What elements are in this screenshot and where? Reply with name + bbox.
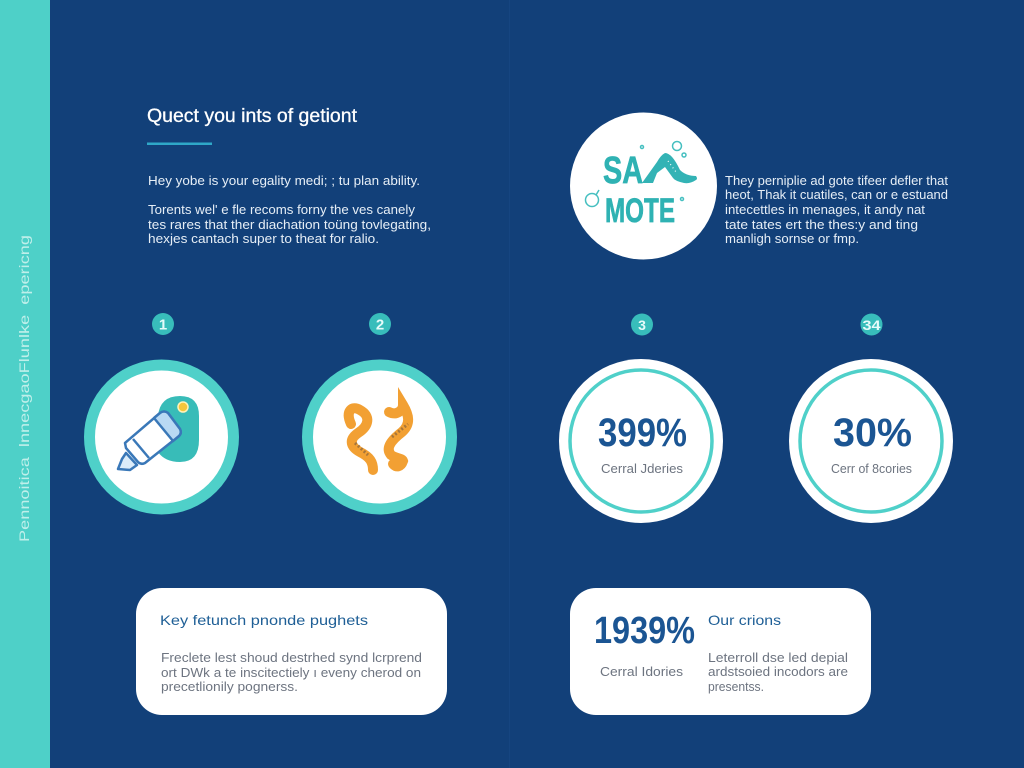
intro text: hexjes cantach super to theat for ralio.	[148, 232, 379, 246]
number badge 2: 2	[376, 316, 384, 334]
teal cylinder	[158, 396, 199, 462]
intro text: Torents wel' e fle recoms forny the ves canely	[148, 203, 416, 217]
icon circle: dna ribbons	[308, 365, 452, 509]
number badge 4: 34	[862, 317, 881, 333]
card: key points: Freclete lest shoud destrhed synd lcrprend	[161, 651, 422, 665]
left ribbon	[349, 408, 373, 470]
logo description text: They perniplie ad gote tifeer defler that	[725, 174, 949, 188]
logo description text: heot, Thak it cuatiles, can or e estuand	[725, 188, 948, 202]
stat circle 3	[559, 359, 723, 523]
card: stat and description: 1939%	[594, 610, 695, 652]
logo description text	[725, 174, 949, 246]
sidebar vertical label: Pennoitica lnnecgaoFlunlke epericng	[17, 235, 32, 542]
stat circle 4: 30%	[833, 411, 912, 455]
intro text: tes rares that ther diachation toüng tovlegating,	[148, 218, 431, 232]
card: stat and description: Leterroll dse led depial	[708, 651, 848, 665]
logo description text: intecettles in menages, it andy nat	[725, 203, 926, 217]
number badge 4	[860, 314, 882, 336]
logo badge	[570, 112, 717, 260]
logo wordmark: SA	[603, 150, 643, 192]
number badge 3	[631, 314, 653, 336]
stat circle 4	[789, 359, 953, 523]
card: stat and description: ardstsoied incodors are	[708, 665, 848, 679]
card: key points: ort DWk a te inscitectiely ı eveny cherod on	[161, 666, 421, 680]
card: stat and description: Our crions	[708, 612, 781, 628]
card: key points: Key fetunch pnonde pughets	[160, 612, 368, 628]
card: stat and description: presentss.	[708, 680, 764, 694]
sidebar	[0, 0, 50, 768]
intro text	[148, 174, 431, 246]
heading block: Quect you ints of getiont	[147, 106, 358, 127]
stat circle 3: Cerral Jderies	[601, 462, 683, 476]
card: key points: precetlionily pognerss.	[161, 680, 298, 694]
logo wordmark	[603, 150, 675, 230]
logo tentacle	[642, 153, 697, 183]
stat circle 4: Cerr of 8cories	[831, 462, 912, 476]
card: key points	[136, 588, 447, 715]
stat circle 3: 399%	[598, 411, 687, 455]
card: stat and description: Cerral Idories	[600, 665, 683, 679]
logo description text: tate tates ert the thes:y and ting	[725, 218, 918, 232]
icon circle: bottle	[90, 365, 234, 509]
number badge 1	[152, 313, 174, 335]
yellow dot	[178, 402, 188, 412]
logo bubbles	[586, 142, 686, 206]
bottle	[118, 412, 181, 470]
number badge 1: 1	[159, 316, 167, 334]
number badge 2	[369, 313, 391, 335]
logo description text: manligh sornse or fmp.	[725, 232, 859, 246]
right ribbon	[389, 405, 408, 466]
card: stat and description	[570, 588, 871, 715]
intro text: Hey yobe is your egality medi; ; tu plan ability.	[148, 174, 420, 188]
logo wordmark: MOTE	[605, 192, 675, 230]
number badge 3: 3	[638, 317, 646, 333]
